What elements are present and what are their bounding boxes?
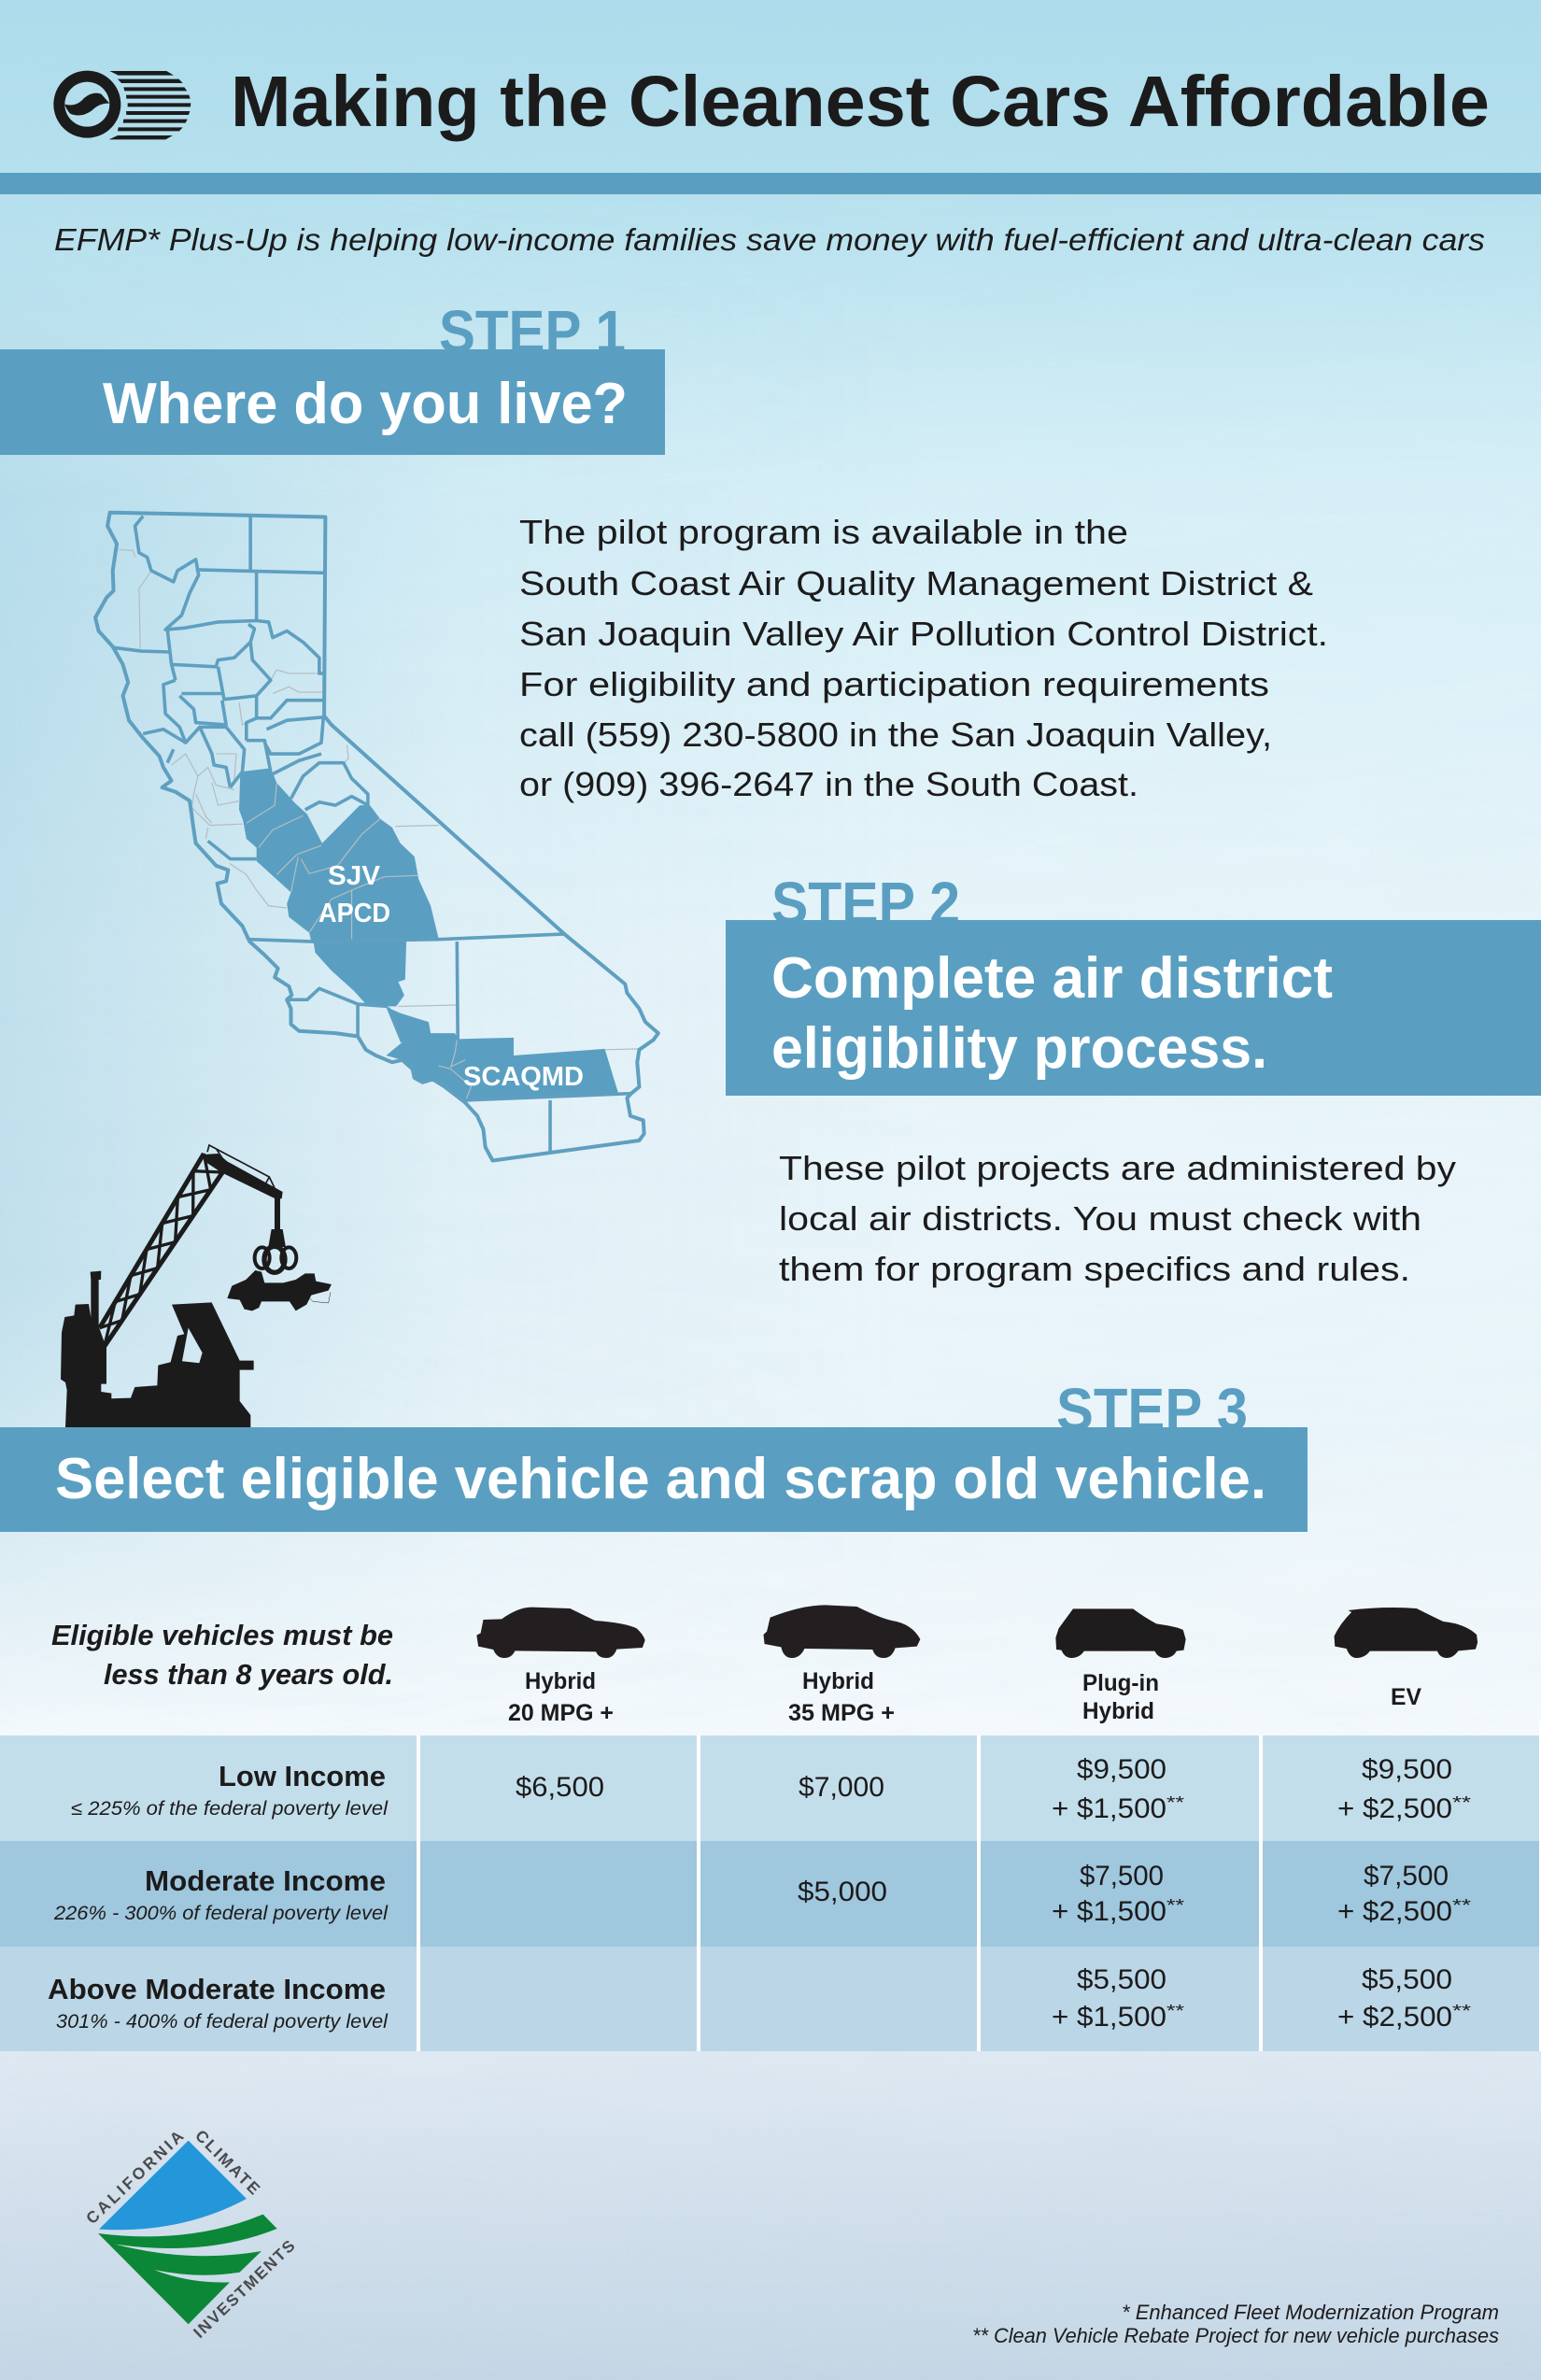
row: moderate income: $5,000 bbox=[798, 1877, 887, 1907]
row: above moderate income: ** bbox=[1452, 2002, 1471, 2020]
table bbox=[0, 1721, 1541, 2051]
logo: California Climate Investments: INVESTMENTS bbox=[190, 2236, 299, 2342]
row: moderate income bbox=[0, 1841, 1541, 1947]
row: moderate income: $7,500 bbox=[1364, 1861, 1449, 1891]
column head: plug-in hybrid bbox=[1082, 1670, 1159, 1724]
column head: plug-in hybrid: Plug-in bbox=[1082, 1670, 1159, 1696]
row: low income bbox=[0, 1735, 1541, 1841]
row: above moderate income: Above Moderate Income bbox=[48, 1973, 386, 2005]
row: above moderate income bbox=[0, 1947, 1541, 2051]
step 1 body text: For eligibility and participation requirements bbox=[519, 665, 1269, 703]
step 3 label: STEP 3 bbox=[1056, 1376, 1248, 1443]
step 1 banner bbox=[0, 349, 665, 455]
eligibility note: Eligible vehicles must be bbox=[51, 1619, 393, 1651]
step 1 body text: call (559) 230-5800 in the San Joaquin Valley, bbox=[519, 715, 1272, 754]
column head: hybrid 20 MPG: 20 MPG + bbox=[508, 1700, 614, 1726]
logo: California Climate Investments bbox=[82, 2126, 299, 2342]
column head: EV: EV bbox=[1391, 1684, 1421, 1710]
map label: SJV APCD bbox=[318, 861, 390, 928]
row: above moderate income: + $1,500 bbox=[1052, 2002, 1166, 2033]
map label: SJV APCD: SJV bbox=[328, 861, 381, 891]
icon: hybrid 20 MPG car bbox=[476, 1608, 645, 1658]
step 1 body text: or (909) 396-2647 in the South Coast. bbox=[519, 765, 1138, 803]
map label: SCAQMD: SCAQMD bbox=[463, 1062, 584, 1092]
step 2 banner: eligibility process. bbox=[771, 1016, 1267, 1081]
step 3 banner: Select eligible vehicle and scrap old vehicle. bbox=[55, 1447, 1266, 1511]
step 1 body text: South Coast Air Quality Management District & bbox=[519, 564, 1313, 602]
air district regions bbox=[239, 768, 618, 1100]
step 2 body text: These pilot projects are administered by bbox=[779, 1149, 1456, 1187]
icon: EV car bbox=[1335, 1608, 1477, 1658]
step 2 banner bbox=[726, 920, 1541, 1096]
row: low income: $7,000 bbox=[799, 1772, 884, 1803]
icon: plug-in hybrid car bbox=[1055, 1608, 1186, 1658]
crane illustration bbox=[61, 1145, 332, 1427]
state outline bbox=[95, 513, 658, 1160]
row: moderate income: + $1,500 bbox=[1052, 1896, 1166, 1927]
row: low income: $9,500 bbox=[1362, 1754, 1452, 1785]
header band bbox=[0, 173, 1541, 194]
step 1 label: STEP 1 bbox=[439, 298, 626, 365]
footnotes bbox=[972, 2301, 1499, 2347]
logo: California Climate Investments: CALIFORNIA bbox=[82, 2126, 188, 2228]
column head: hybrid 35 MPG: Hybrid bbox=[802, 1668, 874, 1694]
step 3 banner bbox=[0, 1427, 1308, 1532]
county borders bbox=[113, 517, 631, 1152]
row: moderate income: $7,500 bbox=[1080, 1861, 1164, 1891]
logo: California Climate Investments: CLIMATE bbox=[191, 2126, 263, 2198]
logo: EFMP emblem bbox=[53, 71, 191, 139]
step 2 body text: local air districts. You must check with bbox=[779, 1199, 1421, 1238]
row: above moderate income: ** bbox=[1166, 2002, 1184, 2020]
row: low income: Low Income bbox=[219, 1760, 386, 1792]
minor county lines bbox=[119, 549, 639, 1156]
subtitle: EFMP* Plus-Up is helping low-income families save money with fuel-efficient and ultra-clean cars bbox=[54, 222, 1485, 257]
row: moderate income: 226% - 300% of federal poverty level bbox=[53, 1903, 389, 1924]
row: low income: + $2,500 bbox=[1337, 1793, 1452, 1824]
row: low income: ** bbox=[1166, 1793, 1184, 1812]
step 1 banner: Where do you live? bbox=[103, 372, 628, 436]
column head: hybrid 35 MPG bbox=[788, 1668, 895, 1726]
step 1 body text: San Joaquin Valley Air Pollution Control District. bbox=[519, 615, 1328, 653]
column head: hybrid 20 MPG bbox=[508, 1668, 614, 1726]
row: above moderate income: + $2,500 bbox=[1337, 2002, 1452, 2033]
row: moderate income: + $2,500 bbox=[1337, 1896, 1452, 1927]
step 2 banner: Complete air district bbox=[771, 946, 1333, 1011]
row: above moderate income: 301% - 400% of federal poverty level bbox=[56, 2011, 389, 2033]
row: low income: $9,500 bbox=[1077, 1754, 1166, 1785]
row: low income: $6,500 bbox=[516, 1772, 604, 1803]
row: low income: ≤ 225% of the federal poverty level bbox=[71, 1798, 389, 1820]
row: moderate income: Moderate Income bbox=[145, 1864, 386, 1897]
row: low income: + $1,500 bbox=[1052, 1793, 1166, 1824]
step 1 body text: The pilot program is available in the bbox=[519, 513, 1128, 551]
column head: hybrid 35 MPG: 35 MPG + bbox=[788, 1700, 895, 1726]
row: low income: ** bbox=[1452, 1793, 1471, 1812]
step 1 body text bbox=[519, 513, 1328, 803]
row: above moderate income: $5,500 bbox=[1077, 1964, 1166, 1995]
map of California bbox=[95, 513, 658, 1160]
row: above moderate income: $5,500 bbox=[1362, 1964, 1452, 1995]
eligibility note bbox=[51, 1619, 393, 1691]
title: Making the Cleanest Cars Affordable bbox=[231, 62, 1490, 142]
column head: plug-in hybrid: Hybrid bbox=[1082, 1698, 1154, 1724]
step 2 body text: them for program specifics and rules. bbox=[779, 1250, 1410, 1288]
row: moderate income: ** bbox=[1452, 1896, 1471, 1915]
icon: hybrid 35 MPG car bbox=[763, 1605, 920, 1658]
step 2 body text bbox=[779, 1149, 1456, 1288]
footnotes: ** Clean Vehicle Rebate Project for new vehicle purchases bbox=[972, 2324, 1499, 2347]
eligibility note: less than 8 years old. bbox=[104, 1658, 393, 1691]
step 2 label: STEP 2 bbox=[771, 870, 960, 937]
column head: hybrid 20 MPG: Hybrid bbox=[525, 1668, 596, 1694]
row: moderate income: ** bbox=[1166, 1896, 1184, 1915]
map label: SJV APCD: APCD bbox=[318, 899, 390, 928]
footnotes: * Enhanced Fleet Modernization Program bbox=[1122, 2301, 1499, 2324]
